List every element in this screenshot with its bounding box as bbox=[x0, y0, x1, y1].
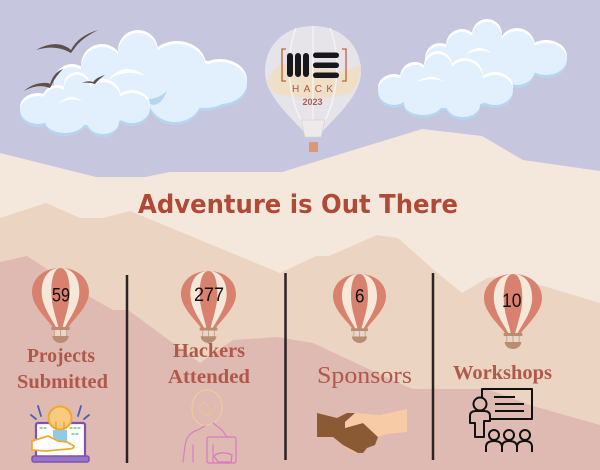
balloon icon bbox=[32, 268, 89, 343]
logo bars bbox=[287, 52, 339, 78]
middle mountain layer bbox=[0, 203, 600, 470]
balloon envelope bbox=[265, 26, 361, 131]
logo brackets bbox=[282, 49, 346, 81]
right cloud group bbox=[378, 19, 567, 120]
icon: hooded hacker bbox=[183, 390, 236, 463]
stat: workshops bbox=[453, 274, 552, 452]
logo HACK: HACK bbox=[292, 84, 333, 95]
far mountain layer bbox=[0, 129, 600, 470]
envelope highlights bbox=[289, 26, 337, 131]
label: Projects bbox=[27, 345, 95, 367]
title: Adventure is Out There bbox=[138, 190, 458, 220]
envelope tan band bbox=[267, 64, 361, 98]
number: 10 bbox=[502, 291, 522, 312]
label: Submitted bbox=[17, 371, 108, 393]
left cloud group bbox=[20, 30, 247, 137]
stat: sponsors bbox=[317, 274, 412, 453]
near mountain layer bbox=[0, 256, 600, 470]
label: Sponsors bbox=[317, 363, 412, 389]
number: 59 bbox=[52, 286, 70, 306]
stat: hackers attended bbox=[168, 271, 250, 463]
stat: projects submitted bbox=[17, 268, 108, 462]
balloon icon bbox=[333, 274, 386, 343]
icon: handshake bbox=[317, 409, 407, 453]
label: Hackers bbox=[173, 340, 245, 362]
dividers bbox=[127, 273, 433, 463]
balloon icon bbox=[181, 271, 236, 343]
icon: idea laptop bbox=[31, 406, 89, 462]
number: 277 bbox=[194, 285, 224, 306]
logo year: 2023 bbox=[302, 97, 323, 107]
balloon icon bbox=[484, 274, 542, 349]
balloon gondola ropes bbox=[301, 120, 325, 137]
birds bbox=[24, 30, 105, 91]
balloon basket bbox=[309, 142, 318, 152]
icon: presenter and audience bbox=[470, 389, 532, 452]
label: Workshops bbox=[453, 362, 552, 384]
number: 6 bbox=[355, 286, 364, 308]
hero balloon logo bbox=[265, 26, 361, 152]
label: Attended bbox=[168, 366, 250, 388]
